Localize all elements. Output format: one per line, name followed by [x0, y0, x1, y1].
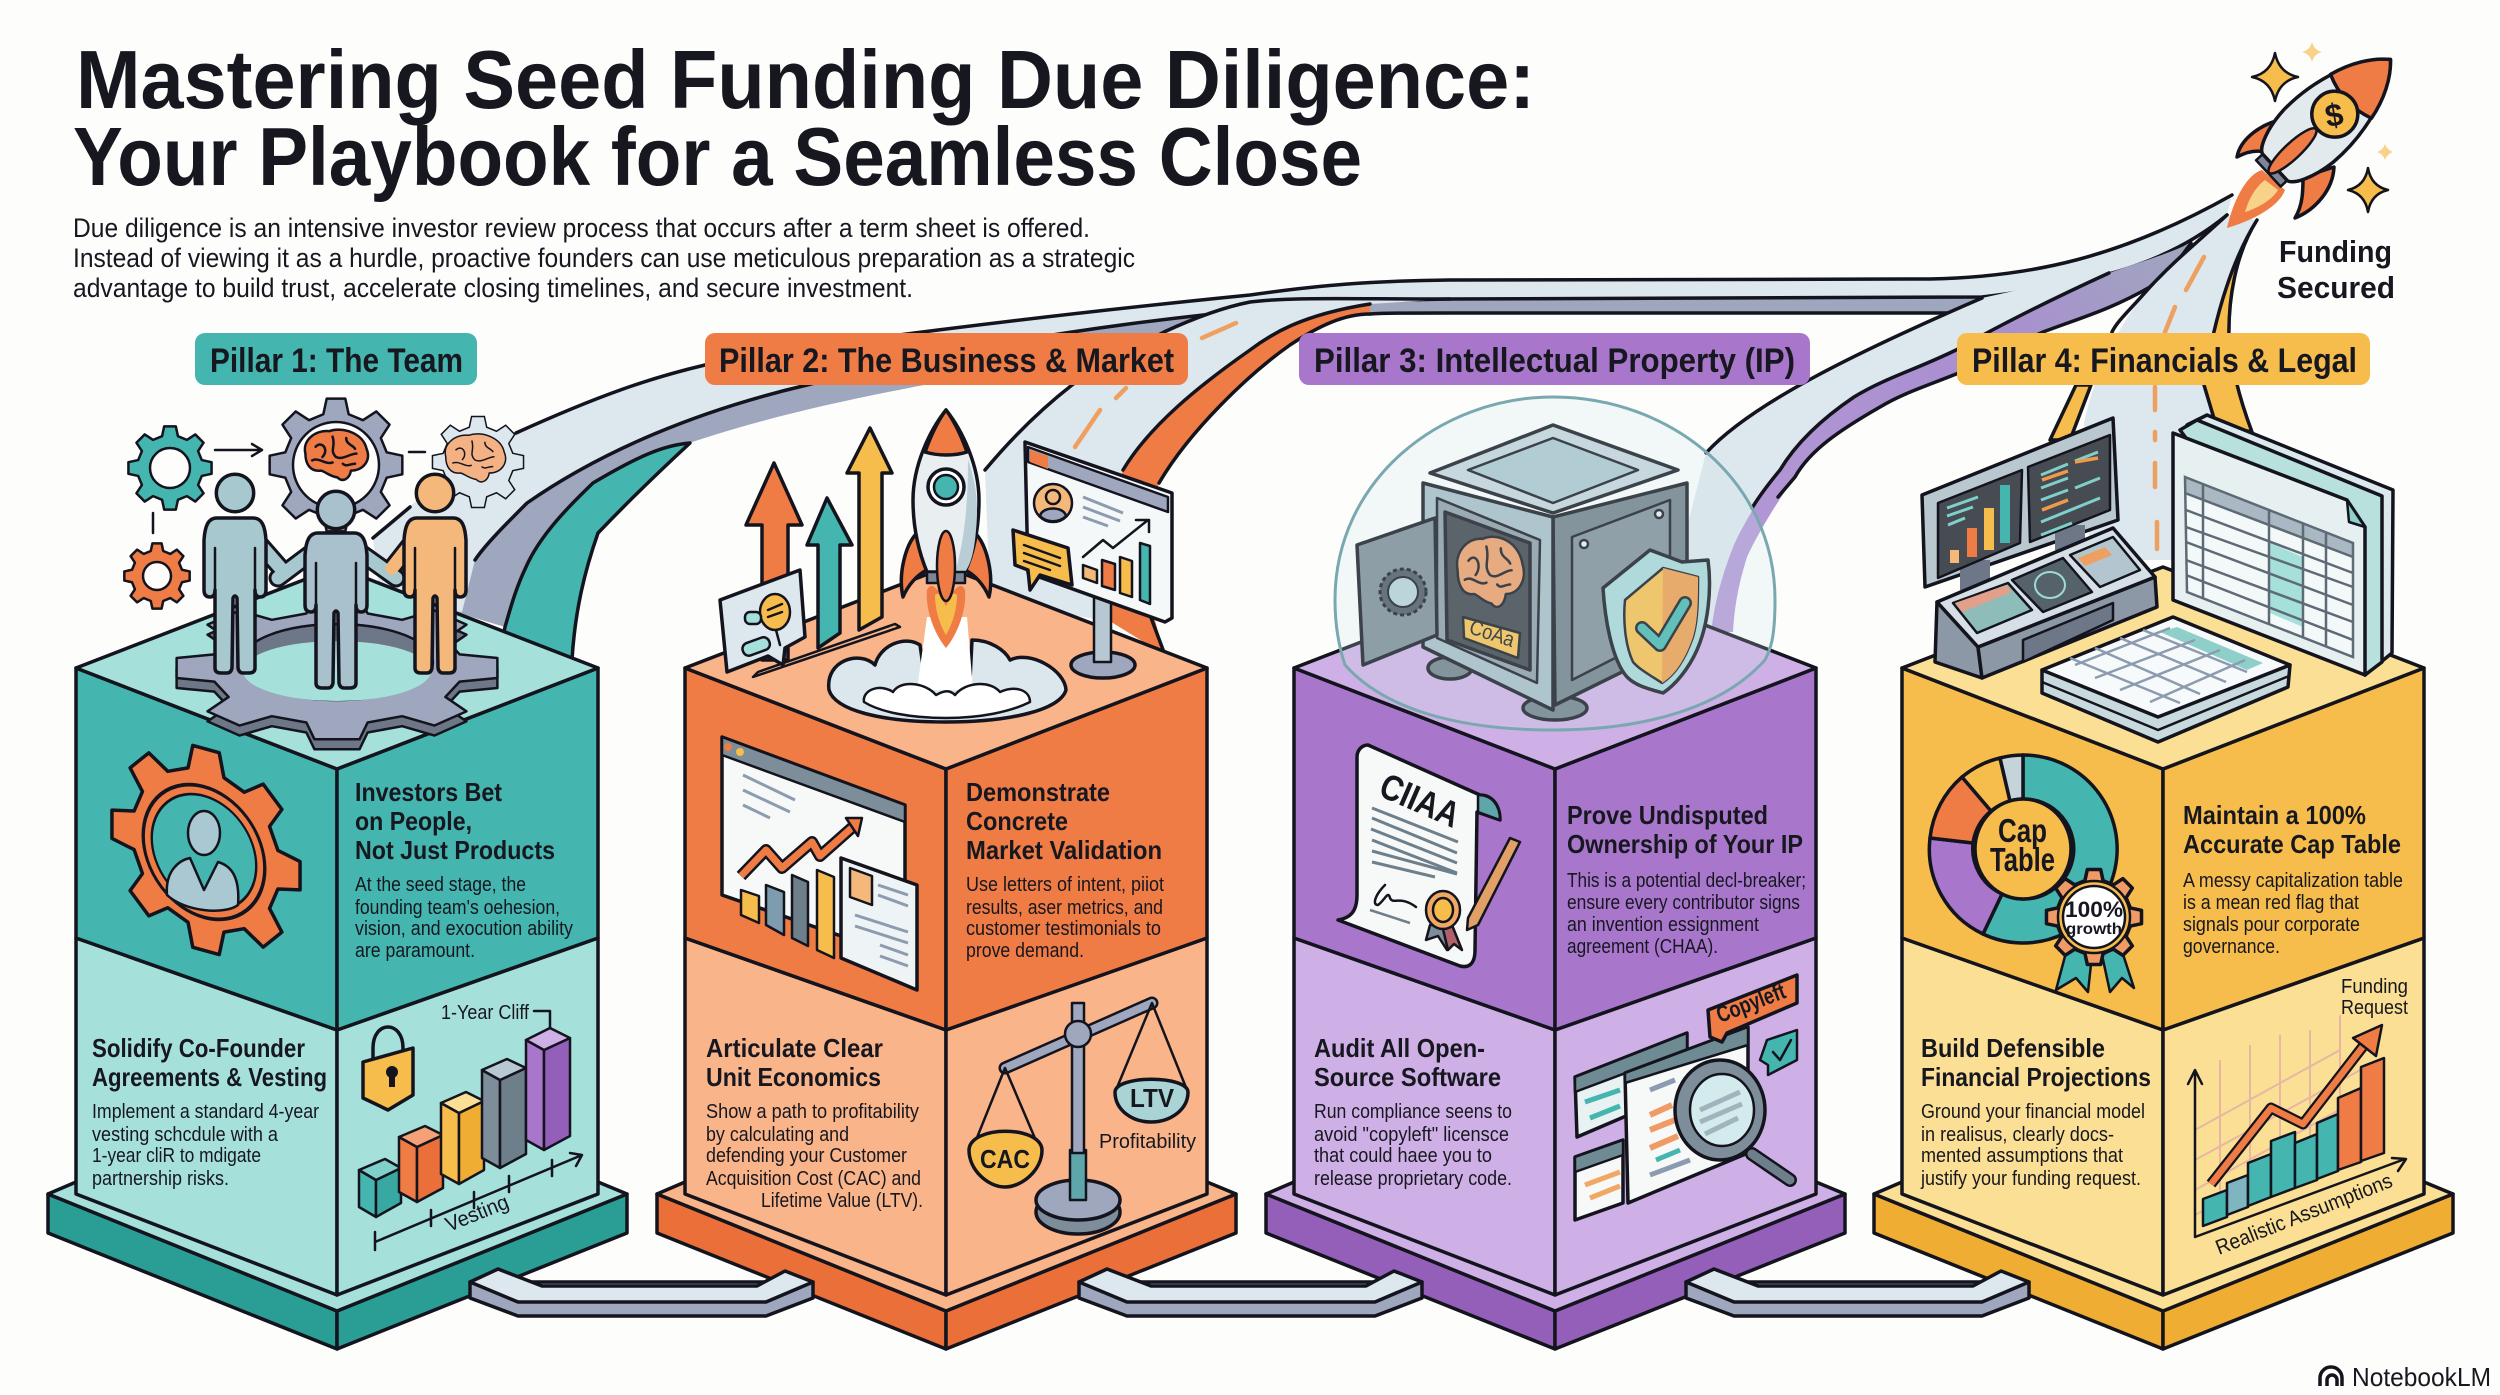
pillar label 1 [195, 333, 477, 385]
vesting bar chart [359, 1002, 582, 1250]
100% growth rosette: growth [2066, 921, 2122, 938]
100% growth rosette [2046, 869, 2142, 992]
panel icon: CAC and LTV scale [969, 1003, 1196, 1234]
panel icon: padlock [363, 1027, 413, 1110]
panel text: investors bet on people: on People, [355, 806, 472, 836]
pillar label 2: Pillar 2: The Business & Market [719, 342, 1174, 380]
pillar label 4: Pillar 4: Financials & Legal [1972, 342, 2357, 380]
panel text: build financial projections [1920, 1033, 2151, 1190]
illustration: shield with check [1603, 550, 1710, 693]
connector: pillar 3 to 4 [1686, 1269, 2029, 1316]
panel text: maintain accurate cap table: is a mean red flag that [2183, 892, 2359, 914]
pillar label 4 [1957, 333, 2370, 385]
cap table donut chart: Table [1990, 841, 2055, 878]
illustration: dashboard board [1013, 442, 1172, 678]
cap table donut chart: Cap [1998, 812, 2047, 849]
ribbon outline: pillar 4 [2112, 215, 2227, 332]
panel text: audit open-source software [1314, 1033, 1512, 1190]
panel text: solidify co-founder agreements: Solidify Co-Founder [92, 1033, 305, 1063]
panel text: maintain accurate cap table: A messy capitalization table [2183, 870, 2403, 892]
panel text: prove undisputed ownership: agreement (CHAA). [1567, 936, 1718, 958]
panel text: solidify co-founder agreements: partnership risks. [92, 1168, 229, 1190]
title: Mastering Seed Funding Due Diligence: [76, 33, 1535, 126]
panel text: maintain accurate cap table: Maintain a 100% [2183, 800, 2366, 830]
ribbon: pillar 4 white band [2084, 215, 2257, 560]
destination rocket: $ [2322, 96, 2346, 134]
panel text: investors bet on people: Not Just Products [355, 835, 555, 865]
panel text: prove undisputed ownership: This is a potential decl-breaker; [1567, 870, 1806, 892]
ribbon: pillar 1 teal band [503, 443, 690, 660]
financial projections chart: Realistic Assumptions [2212, 1169, 2396, 1260]
panel icon: gear with founder [112, 723, 300, 977]
illustration: safe with brain [1357, 425, 1687, 720]
pillar label 3 [1299, 333, 1810, 385]
ribbon: pillar 4 centre dashes [2155, 257, 2204, 549]
panel text: maintain accurate cap table: governance. [2183, 936, 2280, 958]
panel text: prove undisputed ownership: ensure every contributor signs [1567, 892, 1800, 914]
panel icon: CIIAA document: CIIAA [1374, 765, 1466, 835]
funding secured label [2277, 234, 2395, 305]
vesting bar chart: 1-Year Cliff [441, 1002, 529, 1024]
ribbon outlines: pillar 3 [1706, 243, 2191, 508]
panel text: maintain accurate cap table: signals pour corporate [2183, 914, 2360, 936]
illustration: launching rocket [829, 410, 1066, 722]
intro paragraph: advantage to build trust, accelerate closing timelines, and secure investment. [73, 273, 913, 303]
panel text: investors bet on people: At the seed stage, the [355, 874, 526, 896]
panel text: prove undisputed ownership: an invention essignment [1567, 914, 1759, 936]
panel text: audit open-source software: Audit All Open- [1314, 1033, 1485, 1063]
panel text: investors bet on people: are paramount. [355, 940, 475, 962]
funding secured label: Funding [2279, 234, 2392, 269]
intro paragraph: Instead of viewing it as a hurdle, proactive founders can use meticulous preparation as a strategic [73, 243, 1135, 273]
illustration: monitors and console [1922, 418, 2157, 678]
ribbon: pillar 2 white band [985, 299, 1450, 620]
panel text: demonstrate market validation: results, aser metrics, and [966, 897, 1163, 919]
illustration: safe with brain: CoAa [1466, 616, 1518, 652]
intro paragraph [73, 213, 1135, 303]
panel text: audit open-source software: Source Software [1314, 1062, 1501, 1092]
illustration: spreadsheet pages [2173, 415, 2393, 675]
pillar label 3: Pillar 3: Intellectual Property (IP) [1314, 342, 1795, 380]
panel text: maintain accurate cap table [2183, 800, 2403, 958]
panel icon: code audit magnifier: Copyleft [1712, 977, 1789, 1028]
panel text: articulate unit economics: Lifetime Value (LTV). [761, 1190, 923, 1212]
panel text: demonstrate market validation: customer testimonials to [966, 918, 1161, 940]
funding secured label: Secured [2277, 270, 2395, 305]
pillar 3 block [1266, 567, 1845, 1349]
ribbon outlines: pillar 2 [985, 299, 1450, 655]
panel text: solidify co-founder agreements: 1-year cliR to mdigate [92, 1145, 261, 1167]
pillar 1 block [48, 567, 627, 1349]
title [73, 33, 1535, 203]
pillar label 1: Pillar 1: The Team [210, 342, 463, 380]
panel text: prove undisputed ownership [1567, 800, 1806, 958]
ribbon: pillar 2 orange band [1107, 304, 1370, 655]
financial projections chart: Request [2341, 997, 2408, 1019]
illustration: glass dome [1335, 397, 1775, 730]
ribbon: pillar 4 yellow edges [2050, 220, 2257, 440]
panel text: investors bet on people [355, 777, 573, 962]
panel text: build financial projections: Financial Projections [1921, 1062, 2151, 1092]
panel text: demonstrate market validation [966, 777, 1164, 962]
panel text: investors bet on people: Investors Bet [355, 777, 502, 807]
connector: pillar 2 to 3 [1079, 1269, 1422, 1316]
panel text: articulate unit economics: defending your Customer [706, 1145, 907, 1167]
illustration: team around gear [124, 399, 524, 749]
destination rocket [2227, 33, 2415, 228]
ribbon: pillar 1 grey band [455, 297, 1982, 627]
panel text: prove undisputed ownership: Prove Undisputed [1567, 800, 1768, 830]
panel text: articulate unit economics: Unit Economics [706, 1062, 881, 1092]
panel text: prove undisputed ownership: Ownership of Your IP [1567, 829, 1803, 859]
cap table donut chart [1929, 755, 2117, 943]
panel icon: browser with trend chart [722, 737, 917, 990]
panel text: demonstrate market validation: Concrete [966, 806, 1068, 836]
panel icon: CAC and LTV scale: Profitability [1099, 1131, 1196, 1153]
panel text: build financial projections: justify your funding request. [1920, 1168, 2141, 1190]
100% growth rosette: 100% [2065, 897, 2123, 922]
panel text: build financial projections: Build Defensible [1921, 1033, 2105, 1063]
financial projections chart: Funding [2341, 976, 2408, 998]
vesting bar chart: Vesting [442, 1191, 512, 1237]
panel text: demonstrate market validation: Demonstrate [966, 777, 1110, 807]
panel text: articulate unit economics: by calculating and [706, 1124, 849, 1146]
ribbon: pillar 3 purple band [1711, 243, 2191, 632]
panel text: articulate unit economics: Acquisition Cost (CAC) and [706, 1168, 921, 1190]
panel text: solidify co-founder agreements [92, 1033, 327, 1190]
panel text: build financial projections: mented assumptions that [1921, 1145, 2123, 1167]
panel text: build financial projections: in realisus, clearly docs- [1921, 1124, 2114, 1146]
panel icon: code audit magnifier [1575, 975, 1797, 1220]
panel text: investors bet on people: founding team's oehesion, [355, 897, 560, 919]
illustration: chat tablet [720, 570, 805, 672]
ribbon outlines: pillar 1 [373, 195, 2232, 560]
panel text: audit open-source software: avoid "copyleft" licensce [1314, 1124, 1509, 1146]
illustration: paper stack [2042, 617, 2290, 742]
panel text: solidify co-founder agreements: vesting schcdule with a [92, 1124, 279, 1146]
pillar 2 block [657, 567, 1236, 1349]
panel text: audit open-source software: Run compliance seens to [1314, 1101, 1512, 1123]
panel icon: CIIAA document [1338, 745, 1520, 967]
panel text: solidify co-founder agreements: Agreements & Vesting [92, 1062, 327, 1092]
panel text: audit open-source software: that could haee you to [1314, 1145, 1492, 1167]
panel icon: CAC and LTV scale: LTV [1130, 1083, 1175, 1113]
panel text: maintain accurate cap table: Accurate Cap Table [2183, 829, 2401, 859]
title: Your Playbook for a Seamless Close [73, 110, 1362, 203]
financial projections chart [2188, 976, 2408, 1260]
connector: pillar 1 to 2 [470, 1269, 813, 1316]
panel text: build financial projections: Ground your financial model [1921, 1101, 2145, 1123]
ribbon: pillar 3 white band [1660, 270, 2109, 632]
panel text: solidify co-founder agreements: Implement a standard 4-year [92, 1101, 319, 1123]
illustration: growth arrows [746, 428, 900, 677]
panel text: demonstrate market validation: prove demand. [966, 940, 1084, 962]
ribbon: pillar 2 centre dashes [1075, 323, 1236, 447]
panel text: articulate unit economics: Show a path to profitability [706, 1101, 919, 1123]
panel text: demonstrate market validation: Market Validation [966, 835, 1162, 865]
pillar 4 block [1874, 567, 2453, 1349]
intro paragraph: Due diligence is an intensive investor review process that occurs after a term sheet is offered. [73, 213, 1090, 243]
panel text: demonstrate market validation: Use letters of intent, piiot [966, 874, 1164, 896]
panel text: investors bet on people: vision, and exocution ability [355, 918, 573, 940]
ribbon: pillar 1 white band [373, 195, 2232, 612]
panel text: audit open-source software: release proprietary code. [1314, 1168, 1512, 1190]
sparkle stars [2252, 42, 2393, 212]
pillar label 2 [705, 333, 1188, 385]
panel text: articulate unit economics: Articulate Clear [706, 1033, 883, 1063]
panel icon: CAC and LTV scale: CAC [980, 1144, 1030, 1174]
panel text: articulate unit economics [706, 1033, 923, 1212]
NotebookLM logo: NotebookLM [2352, 1362, 2491, 1392]
